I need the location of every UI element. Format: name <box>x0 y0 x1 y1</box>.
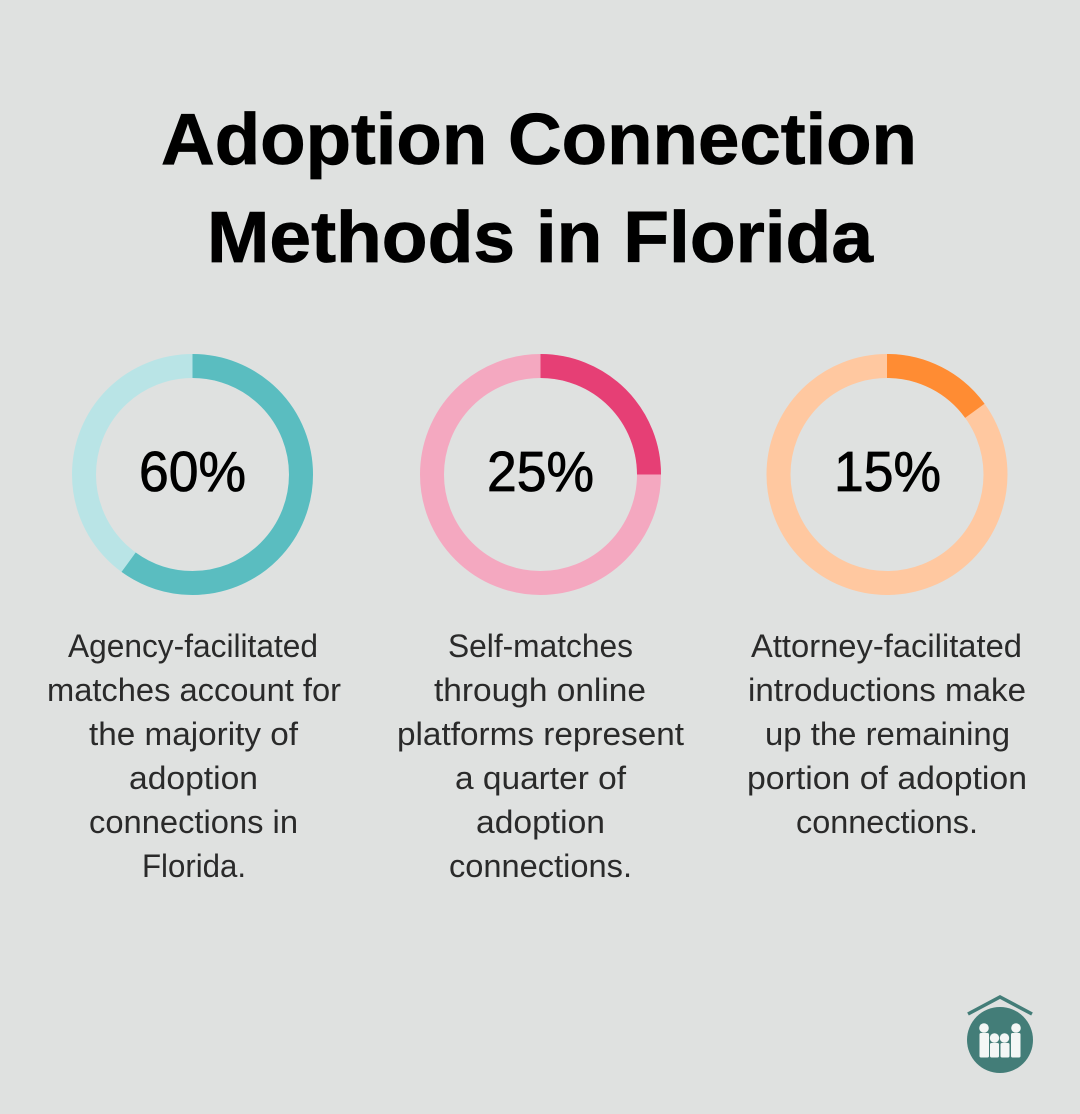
description: self-matches: Self-matches <box>448 628 633 664</box>
description: attorney: Attorney-facilitated <box>751 628 1022 664</box>
description: attorney <box>747 628 1027 840</box>
description: agency: Agency-facilitated <box>68 628 318 664</box>
title <box>161 100 917 278</box>
description: attorney: introductions make <box>748 672 1026 708</box>
description: agency: adoption <box>129 760 258 796</box>
stat: 25%: 25% <box>487 440 594 504</box>
description: agency: the majority of <box>89 716 298 752</box>
description: self-matches: through online <box>434 672 646 708</box>
panel: self-matches 25% <box>397 366 684 884</box>
icon: family house logo <box>967 997 1033 1073</box>
donut chart: 15% <box>778 366 996 583</box>
description: attorney: connections. <box>796 804 978 840</box>
description: attorney: portion of adoption <box>747 760 1027 796</box>
description: attorney: up the remaining <box>765 716 1010 752</box>
donut chart: 60% <box>84 366 301 583</box>
panel: attorney-facilitated 15% <box>747 366 1027 840</box>
stat: 15%: 15% <box>834 440 941 504</box>
donut chart: 25% <box>432 366 649 583</box>
description: self-matches: adoption <box>476 804 605 840</box>
description: self-matches <box>397 628 684 884</box>
description: agency: connections in <box>89 804 298 840</box>
title: Adoption Connection <box>161 100 917 180</box>
description: agency: Florida. <box>142 848 246 884</box>
panel: agency-facilitated 60% <box>47 366 341 884</box>
description: self-matches: a quarter of <box>455 760 626 796</box>
description: self-matches: platforms represent <box>397 716 684 752</box>
stat: 60%: 60% <box>139 440 246 504</box>
title: Methods in Florida <box>207 198 874 278</box>
description: self-matches: connections. <box>449 848 632 884</box>
description: agency: matches account for <box>47 672 341 708</box>
description: agency <box>47 628 341 884</box>
